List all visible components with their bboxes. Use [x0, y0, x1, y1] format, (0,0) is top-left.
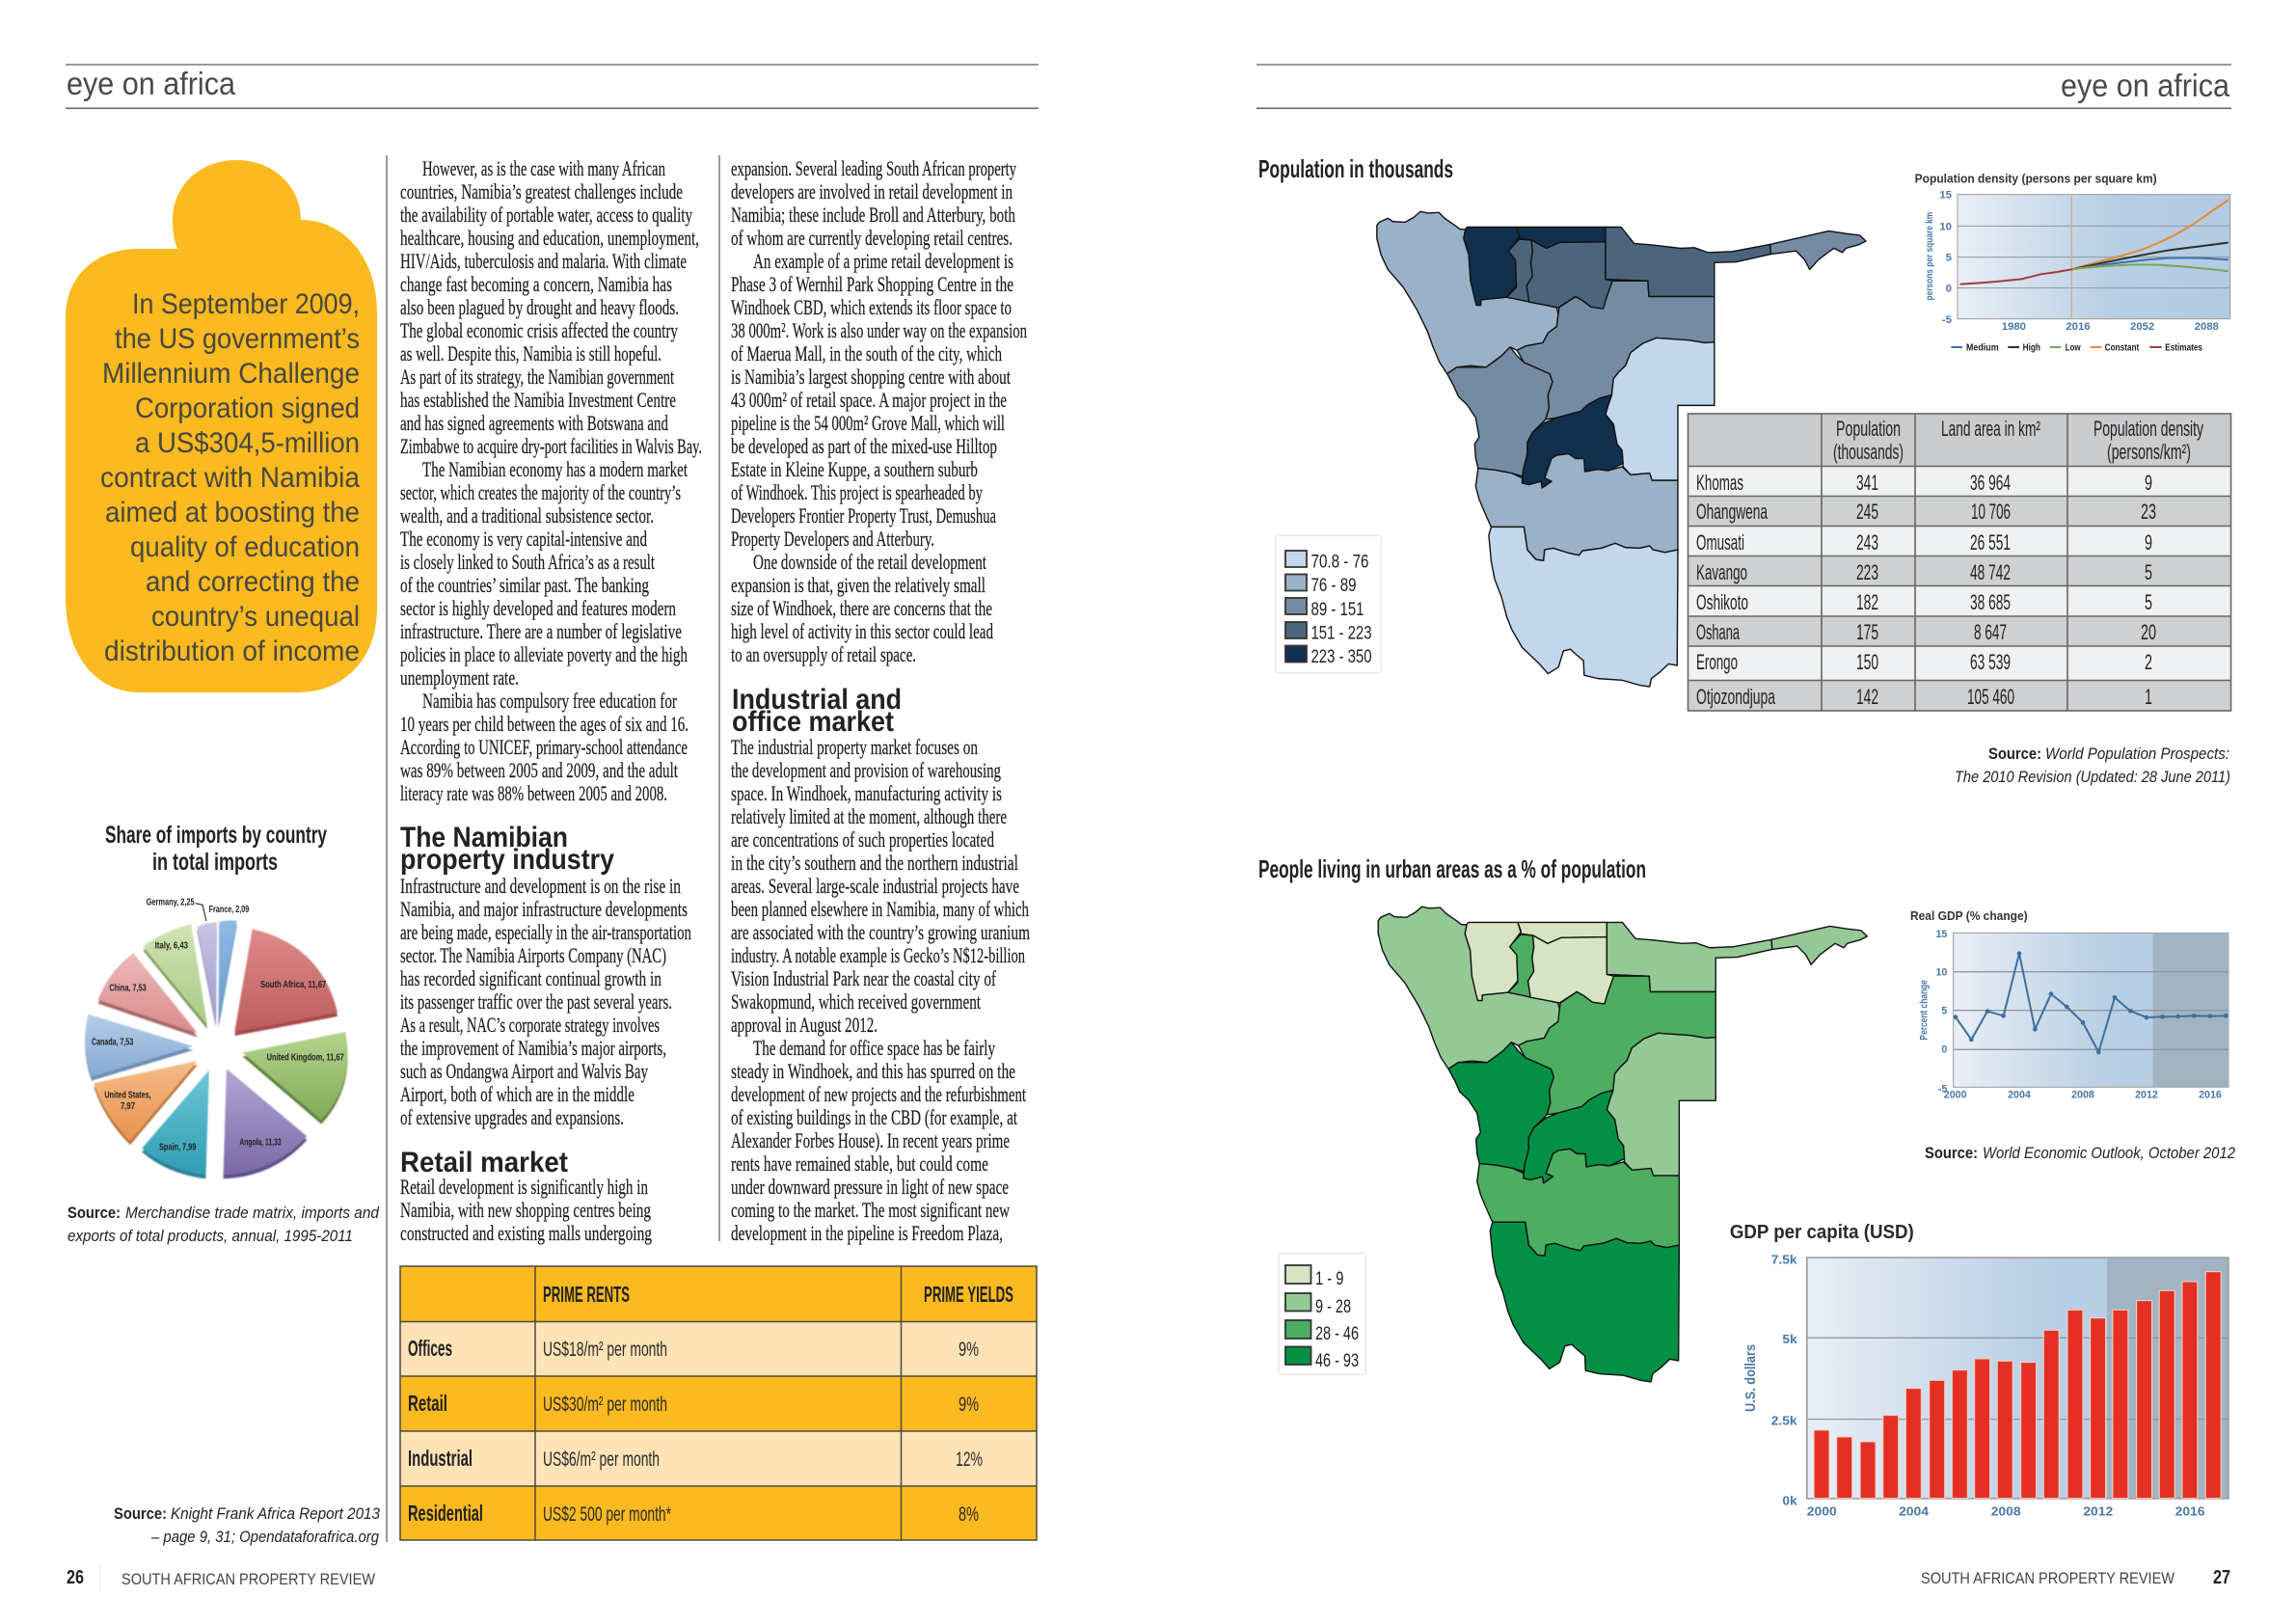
table: population by region: 26 551 [1970, 530, 2011, 555]
source: population: The 2010 Revision (Updated: 28 June 2011) [1955, 768, 2230, 786]
line chart: population density: 0 [1946, 284, 1952, 295]
heading: The Namibian property industry [400, 822, 614, 876]
text block: column 2 industrial: approval in August 2012. [731, 1013, 878, 1037]
table: population by region [1688, 414, 2231, 711]
callout: yellow quote blob: distribution of income [104, 636, 360, 667]
text block: column 2 upper: Property Developers and Atterbury. [731, 527, 934, 551]
source: rents table: Knight Frank Africa Report 2013 [171, 1504, 380, 1523]
line chart: real GDP [1910, 909, 2228, 1101]
source: pie chart: Source: [68, 1204, 121, 1222]
text block: column 1 upper: According to UNICEF, primary-school attendance [400, 735, 688, 759]
table: population by region: (thousands) [1833, 440, 1904, 464]
callout: yellow quote blob: Corporation signed [135, 392, 360, 424]
table: prime rents and yields: US$2 500 per month* [543, 1503, 671, 1526]
table: population by region: Oshikoto [1696, 590, 1748, 614]
line chart: population density: Constant [2105, 342, 2140, 353]
table: prime rents and yields: PRIME YIELDS [924, 1282, 1013, 1307]
text block: column 1 upper: as well. Despite this, Namibia is still hopeful. [400, 341, 662, 365]
table: population by region: Kavango [1696, 560, 1747, 584]
source: pie chart [68, 1204, 379, 1245]
text block: column 2 upper: is Namibia’s largest shopping centre with about [731, 365, 1012, 389]
text block: column 1 property industry [400, 874, 691, 1129]
table: population by region: Oshana [1696, 620, 1740, 644]
text block: column 2 industrial: Vision Industrial Park near the coastal city of [731, 966, 996, 990]
bar chart: GDP per capita: U.S. dollars [1742, 1344, 1758, 1412]
line chart: real GDP: Real GDP (% change) [1910, 909, 2028, 923]
heading: people living in urban areas: People living in urban areas as a % of population [1258, 854, 1646, 883]
text block: column 1 upper: The economy is very capital-intensive and [400, 527, 647, 551]
legend: urban map [1280, 1254, 1365, 1373]
table: population by region: Population density [2093, 417, 2203, 441]
text block: column 1 upper: infrastructure. There are a number of legislative [400, 619, 682, 643]
footer: right page: SOUTH AFRICAN PROPERTY REVIEW [1921, 1569, 2174, 1587]
heading: population in thousands: Population in thousands [1258, 154, 1453, 183]
pie chart: share of imports: 7,97 [121, 1101, 135, 1112]
text block: column 1 upper: the availability of portable water, access to quality [400, 203, 692, 227]
source: real GDP: World Economic Outlook, October 2012 [1983, 1144, 2235, 1162]
pie chart: share of imports: Germany, 2,25 [147, 897, 195, 907]
text block: column 1 upper: Zimbabwe to acquire dry-port facilities in Walvis Bay. [400, 434, 702, 458]
text block: column 1 upper: 10 years per child between the ages of six and 16. [400, 712, 689, 736]
text block: column 1 upper: was 89% between 2005 and 2009, and the adult [400, 758, 678, 782]
callout: yellow quote blob [66, 160, 377, 692]
line chart: population density: Low [2066, 342, 2081, 353]
line chart: real GDP: 10 [1935, 966, 1947, 978]
callout: yellow quote blob: Millennium Challenge [102, 358, 360, 390]
text block: column 1 upper: countries, Namibia’s greatest challenges include [400, 179, 683, 203]
text block: column 2 upper: Phase 3 of Wernhil Park Shopping Centre in the [731, 272, 1013, 296]
source: rents table: – page 9, 31; Opendataforafrica.org [150, 1528, 379, 1546]
table: population by region: Ohangwena [1696, 500, 1768, 524]
text block: column 1 upper: unemployment rate. [400, 665, 519, 690]
text block: column 1 upper: However, as is the case with many African [422, 156, 665, 180]
source: population [1955, 744, 2230, 786]
text block: column 1 property industry: As a result, NAC’s corporate strategy involves [400, 1013, 660, 1037]
line chart: real GDP: Percent change [1918, 980, 1930, 1040]
map: population in thousands [1377, 211, 1866, 687]
line chart: population density: 2052 [2130, 321, 2154, 333]
pie chart: share of imports [85, 897, 348, 1178]
text block: column 2 upper: of Windhoek. This project is spearheaded by [731, 480, 983, 504]
legend: urban map: 1 - 9 [1315, 1269, 1344, 1289]
text block: column 1 upper: of the countries’ similar past. The banking [400, 573, 649, 597]
pie chart: share of imports: France, 2,09 [209, 905, 250, 915]
text block: column 2 upper: Estate in Kleine Kuppe, a southern suburb [731, 457, 978, 481]
heading: share of imports: in total imports [152, 849, 278, 876]
pie chart: share of imports: Canada, 7,53 [92, 1037, 134, 1047]
text block: column 1 upper: policies in place to alleviate poverty and the high [400, 642, 688, 666]
text block: column 2 industrial: been planned elsewhere in Namibia, many of which [731, 897, 1029, 921]
text block: column 1 property industry: such as Ondangwa Airport and Walvis Bay [400, 1059, 648, 1083]
text block: column 1 upper [400, 156, 702, 805]
line chart: population density: High [2023, 342, 2040, 353]
source: pie chart: exports of total products, annual, 1995-2011 [68, 1227, 353, 1245]
bar chart: GDP per capita: 2000 [1807, 1503, 1837, 1518]
text block: column 1 upper: The Namibian economy has a modern market [422, 457, 689, 481]
text block: column 2 upper: Namibia; these include Broll and Atterbury, both [731, 203, 1015, 227]
header: left page: eye on africa [67, 66, 236, 101]
table: population by region: 1 [2145, 685, 2152, 709]
source: rents table: Source: [114, 1504, 167, 1523]
legend: population map: 223 - 350 [1311, 647, 1371, 667]
table: prime rents and yields: 9% [959, 1394, 979, 1416]
text block: column 2 upper: One downside of the retail development [753, 550, 986, 574]
text block: column 2 industrial: of existing buildings in the CBD (for example, at [731, 1105, 1017, 1129]
source: rents table [114, 1504, 380, 1546]
bar chart: GDP per capita: 2008 [1991, 1503, 2021, 1518]
pie chart: share of imports: South Africa, 11,67 [260, 980, 326, 990]
footer: left page: 26 [67, 1567, 84, 1588]
text block: column 1 upper: and has signed agreements with Botswana and [400, 411, 668, 435]
bar chart: GDP per capita: GDP per capita (USD) [1730, 1220, 1914, 1243]
legend: urban map: 9 - 28 [1315, 1297, 1351, 1317]
text block: column 1 property industry: the improvement of Namibia’s major airports, [400, 1036, 666, 1060]
text block: column 2 upper: size of Windhoek, there are concerns that the [731, 596, 992, 620]
text block: column 2 upper: pipeline is the 54 000m² Grove Mall, which will [731, 411, 1005, 435]
table: population by region: 5 [2145, 560, 2152, 584]
text block: column 1 property industry: are being made, especially in the air-transportation [400, 920, 691, 944]
map: urban population share [1378, 907, 1867, 1382]
table: prime rents and yields [400, 1266, 1037, 1540]
legend: population map: 76 - 89 [1311, 576, 1356, 596]
line chart: real GDP: 5 [1941, 1006, 1947, 1017]
pie chart: share of imports: Italy, 6,43 [155, 940, 188, 951]
text block: column 1 upper: Namibia has compulsory free education for [422, 689, 677, 713]
table: population by region: 36 964 [1970, 471, 2011, 495]
table: prime rents and yields: Retail [408, 1391, 447, 1416]
table: prime rents and yields: 12% [956, 1448, 983, 1471]
table: population by region: 142 [1856, 685, 1878, 709]
table: population by region: Omusati [1696, 530, 1744, 555]
bar chart: GDP per capita: 0k [1782, 1493, 1797, 1508]
pie chart: share of imports: Angola, 11,33 [239, 1138, 282, 1149]
source: pie chart: Merchandise trade matrix, imports and [125, 1204, 379, 1222]
line chart: real GDP: 2008 [2071, 1090, 2094, 1101]
text block: column 1 upper: healthcare, housing and education, unemployment, [400, 226, 699, 250]
legend: urban map: 28 - 46 [1315, 1324, 1359, 1344]
legend: population map [1277, 536, 1381, 672]
text block: column 2 industrial: in the city’s southern and the northern industrial [731, 851, 1018, 875]
source: population: World Population Prospects: [2045, 744, 2229, 763]
line chart: population density: 15 [1939, 190, 1952, 202]
legend: urban map: 46 - 93 [1315, 1351, 1359, 1371]
bar chart: GDP per capita: 2004 [1899, 1503, 1929, 1518]
bar chart: GDP per capita [1730, 1220, 2228, 1518]
table: population by region: 9 [2145, 530, 2152, 555]
callout: yellow quote blob: country’s unequal [151, 601, 360, 633]
text block: column 1 retail [400, 1175, 652, 1245]
table: prime rents and yields: US$30/m² per month [543, 1394, 667, 1416]
text block: column 1 upper: is closely linked to South Africa’s as a result [400, 550, 655, 574]
bar chart: GDP per capita: 2016 [2175, 1503, 2205, 1518]
line chart: real GDP: 2000 [1944, 1090, 1967, 1101]
table: prime rents and yields: Residential [408, 1501, 483, 1526]
heading: The Namibian property industry: property industry [400, 844, 614, 876]
table: population by region: 10 706 [1971, 500, 2011, 524]
line chart: real GDP: 0 [1941, 1044, 1947, 1056]
text block: column 2 industrial: rents have remained stable, but could come [731, 1151, 988, 1176]
table: prime rents and yields: US$6/m² per month [543, 1448, 660, 1471]
table: population by region: 223 [1856, 560, 1878, 584]
text block: column 2 industrial: space. In Windhoek, manufacturing activity is [731, 781, 1002, 805]
text block: column 1 retail: constructed and existing malls undergoing [400, 1221, 652, 1245]
table: population by region: 63 539 [1970, 650, 2011, 674]
bar chart: GDP per capita: 7.5k [1771, 1252, 1797, 1266]
table: population by region: 20 [2141, 620, 2156, 644]
line chart: population density: persons per square km [1925, 212, 1935, 300]
source: real GDP: Source: [1925, 1144, 1978, 1162]
table: population by region: 48 742 [1970, 560, 2011, 584]
heading: share of imports [105, 822, 327, 876]
text block: column 2 upper: expansion is that, given the relatively small [731, 573, 986, 597]
text block: column 2 upper: expansion. Several leading South African property [731, 156, 1016, 180]
callout: yellow quote blob: quality of education [130, 531, 360, 563]
table: prime rents and yields: PRIME RENTS [543, 1282, 630, 1307]
text block: column 2 upper: An example of a prime retail development is [753, 249, 1013, 273]
line chart: real GDP: 2016 [2199, 1090, 2222, 1101]
header: right page: eye on africa [2061, 68, 2230, 103]
text block: column 1 upper: has established the Namibia Investment Centre [400, 388, 676, 412]
callout: yellow quote blob: contract with Namibia [100, 462, 360, 494]
text block: column 2 upper: Developers Frontier Property Trust, Demushua [731, 503, 996, 528]
callout: yellow quote blob: In September 2009, [132, 288, 360, 320]
text block: column 2 industrial: The industrial property market focuses on [731, 735, 978, 759]
line chart: population density: 10 [1939, 221, 1952, 232]
source: population: Source: [1988, 744, 2041, 763]
text block: column 1 upper: As part of its strategy, the Namibian government [400, 365, 674, 389]
footer: right page: 27 [2213, 1567, 2230, 1588]
heading: share of imports: Share of imports by country [105, 822, 327, 849]
heading: Industrial and office market: office market [732, 706, 894, 738]
heading: Industrial and office market: Industrial and [732, 684, 902, 716]
bar chart: GDP per capita: 2.5k [1771, 1413, 1797, 1427]
line chart: population density: 1980 [2002, 321, 2026, 333]
table: population by region: 182 [1856, 590, 1878, 614]
table: prime rents and yields: Offices [408, 1336, 452, 1361]
bar chart: GDP per capita: 5k [1782, 1332, 1797, 1346]
table: population by region: 38 685 [1970, 590, 2011, 614]
table: prime rents and yields: 9% [959, 1339, 979, 1361]
text block: column 1 upper: sector, which creates the majority of the country’s [400, 480, 681, 504]
text block: column 1 property industry: its passenger traffic over the past several years. [400, 989, 672, 1014]
footer: left page [67, 1564, 375, 1593]
line chart: population density: -5 [1942, 314, 1952, 326]
pie chart: share of imports: China, 7,53 [109, 983, 147, 993]
text block: column 2 upper: of Maerua Mall, in the south of the city, which [731, 341, 1002, 365]
line chart: population density: 2088 [2195, 321, 2219, 333]
table: population by region: Otjozondjupa [1696, 685, 1775, 709]
line chart: real GDP: -5 [1938, 1083, 1947, 1095]
text block: column 2 industrial [731, 735, 1030, 1245]
table: population by region: Khomas [1696, 471, 1743, 495]
text block: column 2 upper [731, 156, 1027, 666]
callout: yellow quote blob: aimed at boosting the [105, 497, 360, 528]
text block: column 1 upper: The global economic crisis affected the country [400, 318, 679, 342]
text block: column 2 industrial: The demand for office space has be fairly [753, 1036, 995, 1060]
heading: The Namibian property industry: The Namibian [400, 822, 568, 853]
text block: column 2 industrial: are concentrations of such properties located [731, 827, 994, 852]
table: population by region: 8 647 [1974, 620, 2007, 644]
table: population by region: 5 [2145, 590, 2152, 614]
text block: column 2 industrial: coming to the market. The most significant new [731, 1198, 1010, 1222]
line chart: population density: Population density (persons per square km) [1915, 172, 2157, 185]
text block: column 1 retail: Retail development is significantly high in [400, 1175, 648, 1199]
text block: column 2 industrial: are associated with the country’s growing uranium [731, 920, 1030, 944]
pie chart: share of imports: Spain, 7,99 [159, 1143, 197, 1153]
line chart: population density [1915, 172, 2230, 353]
text block: column 2 upper: 38 000m². Work is also under way on the expansion [731, 318, 1027, 342]
bar chart: GDP per capita: 2012 [2083, 1503, 2113, 1518]
text block: column 2 industrial: relatively limited at the moment, although there [731, 804, 1007, 828]
table: population by region: Population [1836, 417, 1901, 441]
column dividers [386, 155, 720, 1542]
text block: column 1 property industry: has recorded significant continual growth in [400, 966, 662, 990]
pie chart: share of imports: United States, [104, 1090, 151, 1100]
line chart: population density: 2016 [2066, 321, 2091, 333]
text block: column 1 retail: Namibia, with new shopping centres being [400, 1198, 651, 1222]
table: population by region: 23 [2141, 500, 2156, 524]
text block: column 1 property industry: of extensive upgrades and expansions. [400, 1105, 624, 1129]
footer: left page: SOUTH AFRICAN PROPERTY REVIEW [122, 1570, 375, 1588]
table: population by region: 9 [2145, 471, 2152, 495]
table: population by region: 245 [1856, 500, 1878, 524]
line chart: population density: Medium [1966, 342, 1999, 353]
table: population by region: Land area in km² [1941, 417, 2040, 441]
table: prime rents and yields: 8% [959, 1503, 979, 1526]
text block: column 2 upper: of whom are currently developing retail centres. [731, 226, 1013, 250]
pie chart: share of imports: United Kingdom, 11,67 [267, 1052, 344, 1063]
callout: yellow quote blob: a US$304,5-million [135, 427, 360, 459]
line chart: population density: Estimates [2165, 342, 2202, 353]
table: prime rents and yields: Industrial [408, 1446, 473, 1471]
text block: column 1 upper: wealth, and a traditional subsistence sector. [400, 503, 654, 528]
line chart: real GDP: 15 [1935, 929, 1947, 940]
table: population by region: (persons/km²) [2107, 440, 2191, 464]
table: population by region: 105 460 [1967, 685, 2014, 709]
heading: Retail market: Retail market [400, 1147, 568, 1178]
text block: column 2 upper: be developed as part of the mixed-use Hilltop [731, 434, 997, 458]
text block: column 2 upper: 43 000m² of retail space. A major project in the [731, 388, 1007, 412]
text block: column 2 upper: to an oversupply of retail space. [731, 642, 916, 666]
text block: column 2 upper: high level of activity in this sector could lead [731, 619, 993, 643]
text block: column 2 industrial: the development and provision of warehousing [731, 758, 1001, 782]
text block: column 2 industrial: under downward pressure in light of new space [731, 1175, 1009, 1199]
text block: column 2 industrial: Alexander Forbes House). In recent years prime [731, 1128, 1010, 1152]
legend: population map: 70.8 - 76 [1311, 552, 1369, 573]
text block: column 1 upper: HIV/Aids, tuberculosis and malaria. With climate [400, 249, 687, 273]
line chart: real GDP: 2004 [2008, 1090, 2031, 1101]
table: population by region: 243 [1856, 530, 1878, 555]
text block: column 2 industrial: development of new projects and the refurbishment [731, 1082, 1026, 1106]
line chart: population density: 5 [1946, 253, 1952, 264]
text block: column 2 industrial: areas. Several large-scale industrial projects have [731, 874, 1019, 898]
text block: column 2 industrial: industry. A notable example is Gecko’s N$12-billion [731, 943, 1025, 967]
text block: column 2 industrial: steady in Windhoek, and this has spurred on the [731, 1059, 1015, 1083]
text block: column 2 industrial: development in the pipeline is Freedom Plaza, [731, 1221, 1003, 1245]
text block: column 1 property industry: Infrastructure and development is on the rise in [400, 874, 681, 898]
text block: column 1 upper: also been plagued by drought and heavy floods. [400, 295, 679, 319]
table: population by region: 175 [1856, 620, 1878, 644]
text block: column 1 upper: literacy rate was 88% between 2005 and 2008. [400, 781, 667, 805]
table: population by region: 2 [2145, 650, 2152, 674]
text block: column 1 upper: sector is highly developed and features modern [400, 596, 676, 620]
line chart: real GDP: 2012 [2135, 1090, 2158, 1101]
table: population by region: Erongo [1696, 650, 1738, 674]
text block: column 2 upper: developers are involved in retail development in [731, 179, 1013, 203]
heading: Industrial and office market [732, 684, 902, 738]
legend: population map: 89 - 151 [1311, 600, 1364, 620]
table: population by region: 341 [1856, 471, 1878, 495]
text block: column 1 property industry: Namibia, and major infrastructure developments [400, 897, 688, 921]
legend: population map: 151 - 223 [1311, 623, 1371, 644]
callout: yellow quote blob: and correcting the [146, 566, 360, 598]
text block: column 1 upper: change fast becoming a concern, Namibia has [400, 272, 672, 296]
text block: column 1 property industry: Airport, both of which are in the middle [400, 1082, 635, 1106]
table: population by region: 150 [1856, 650, 1878, 674]
callout: yellow quote blob: the US government’s [115, 323, 360, 355]
text block: column 2 industrial: Swakopmund, which received government [731, 989, 981, 1014]
text block: column 1 property industry: sector. The Namibia Airports Company (NAC) [400, 943, 666, 967]
table: prime rents and yields: US$18/m² per month [543, 1339, 667, 1361]
text block: column 2 upper: Windhoek CBD, which extends its floor space to [731, 295, 1012, 319]
